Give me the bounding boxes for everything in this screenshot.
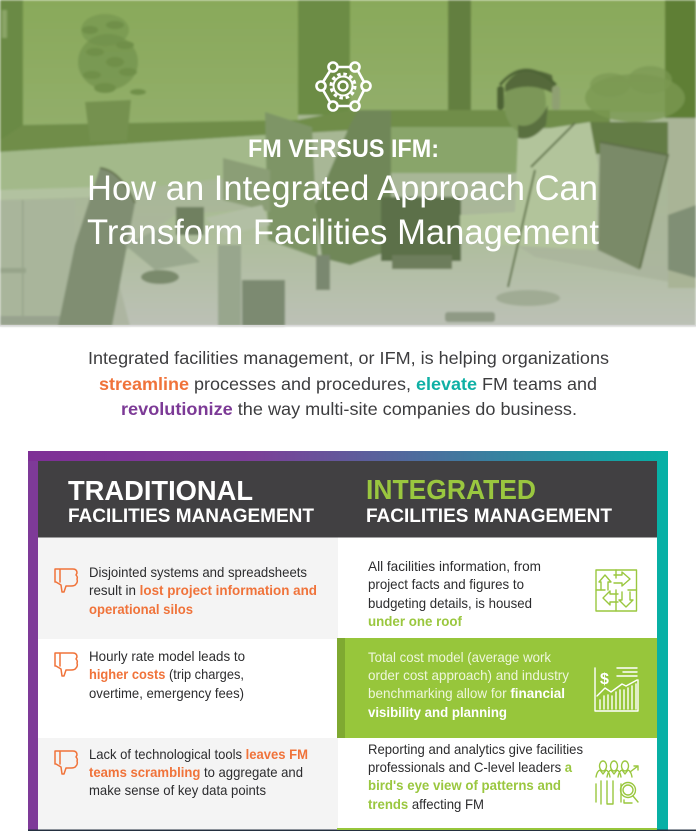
man xyxy=(460,122,598,250)
title: How an Integrated Approach Can xyxy=(87,169,598,208)
icon: team analytics xyxy=(596,761,638,804)
traditional item 2 xyxy=(55,649,245,701)
hero photo background xyxy=(0,0,696,326)
icon: thumbs down xyxy=(55,569,77,592)
intro text: revolutionize the way multi-site companies do business. xyxy=(121,399,577,419)
intro text xyxy=(88,348,609,419)
integrated item 2: benchmarking allow for financial xyxy=(368,686,565,701)
integrated item 1: budgeting details, is housed xyxy=(368,596,532,611)
window plant right xyxy=(585,66,685,122)
traditional item 2: higher costs (trip charges, xyxy=(89,667,244,682)
traditional item 3: Lack of technological tools leaves FM xyxy=(89,747,308,762)
integrated item 3 xyxy=(368,742,638,812)
integrated item 2 xyxy=(368,650,638,720)
hero separator xyxy=(0,325,696,326)
intro text: streamline processes and procedures, elevate FM teams and xyxy=(99,374,597,394)
left heading xyxy=(68,475,314,527)
desk xyxy=(113,205,696,326)
integrated item 1: project facts and figures to xyxy=(368,577,524,592)
integrated item 2: visibility and planning xyxy=(368,705,507,720)
row backgrounds xyxy=(38,538,657,830)
icon: money chart xyxy=(595,668,638,711)
left heading: FACILITIES MANAGEMENT xyxy=(68,506,314,527)
title: FM VERSUS IFM: xyxy=(248,135,439,163)
header bar xyxy=(38,461,657,538)
traditional item 1 xyxy=(55,565,317,617)
traditional item 3 xyxy=(55,747,308,798)
right heading: FACILITIES MANAGEMENT xyxy=(366,506,612,527)
left heading: TRADITIONAL xyxy=(68,475,253,506)
icon: money chart: $ xyxy=(600,671,609,688)
traditional item 3: teams scrambling to aggregate and xyxy=(89,765,303,780)
icon: thumbs down xyxy=(55,653,77,676)
integrated item 3: Reporting and analytics give facilities xyxy=(368,742,583,757)
integrated item 1: All facilities information, from xyxy=(368,559,541,574)
integrated item 2: order cost approach) and industry xyxy=(368,668,569,683)
integrated item 1: under one roof xyxy=(368,614,462,629)
integrated item 1 xyxy=(368,559,636,629)
traditional item 1: operational silos xyxy=(89,602,193,617)
center monitors and laptop xyxy=(265,112,318,258)
integrated item 2: Total cost model (average work xyxy=(368,650,551,665)
mic stand xyxy=(508,123,575,287)
icon: puzzle arrows xyxy=(596,570,636,611)
left chair xyxy=(58,168,135,326)
icon: gear network xyxy=(316,62,370,110)
traditional item 1: result in lost project information and xyxy=(89,583,317,598)
intro text: Integrated facilities management, or IFM, is helping organizations xyxy=(88,348,609,368)
traditional item 3: make sense of key data points xyxy=(89,783,266,798)
keyboard and mouse xyxy=(125,228,200,270)
right chair xyxy=(598,142,668,270)
right heading: INTEGRATED xyxy=(366,474,536,505)
title: Transform Facilities Management xyxy=(87,213,599,252)
integrated item 3: bird's eye view of patterns and xyxy=(368,778,561,793)
traditional item 2: overtime, emergency fees) xyxy=(89,686,244,701)
window plant left xyxy=(78,14,146,95)
traditional item 2: Hourly rate model leads to xyxy=(89,649,245,664)
right heading xyxy=(366,474,612,527)
panel: comparison table xyxy=(28,451,696,831)
integrated item 3: trends affecting FM xyxy=(368,797,484,812)
title xyxy=(87,135,599,252)
gradient frame xyxy=(28,451,668,831)
icon: thumbs down xyxy=(55,751,77,774)
integrated item 3: professionals and C-level leaders a xyxy=(368,760,572,775)
traditional item 1: Disjointed systems and spreadsheets xyxy=(89,565,307,580)
